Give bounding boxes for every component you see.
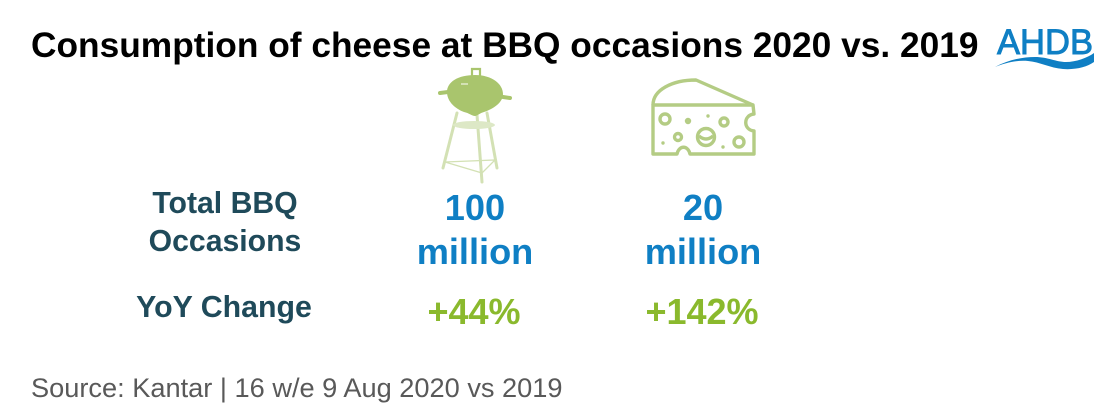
value: 20 million: million bbox=[645, 231, 761, 272]
value: 100 million bbox=[417, 187, 533, 272]
value: 20 million bbox=[645, 187, 761, 272]
source note: Source: Kantar | 16 w/e 9 Aug 2020 vs 2019 bbox=[31, 372, 563, 403]
row label: YoY Change: YoY Change bbox=[136, 291, 312, 324]
value: +44%: +44% bbox=[427, 291, 521, 332]
title: Consumption of cheese at BBQ occasions 2020 vs. 2019 bbox=[31, 26, 978, 65]
value: 20 million: 20 bbox=[683, 187, 723, 228]
row label: Total BBQ Occasions: Occasions bbox=[149, 225, 301, 258]
value: +142%: +142% bbox=[645, 291, 759, 332]
row label: Total BBQ Occasions bbox=[149, 187, 301, 258]
icon: cheese wedge bbox=[651, 78, 756, 156]
value: 100 million: million bbox=[417, 231, 533, 272]
value: 100 million: 100 bbox=[445, 187, 505, 228]
row label: Total BBQ Occasions: Total BBQ bbox=[152, 187, 298, 220]
logo: AHDB: AHDB bbox=[997, 23, 1093, 62]
